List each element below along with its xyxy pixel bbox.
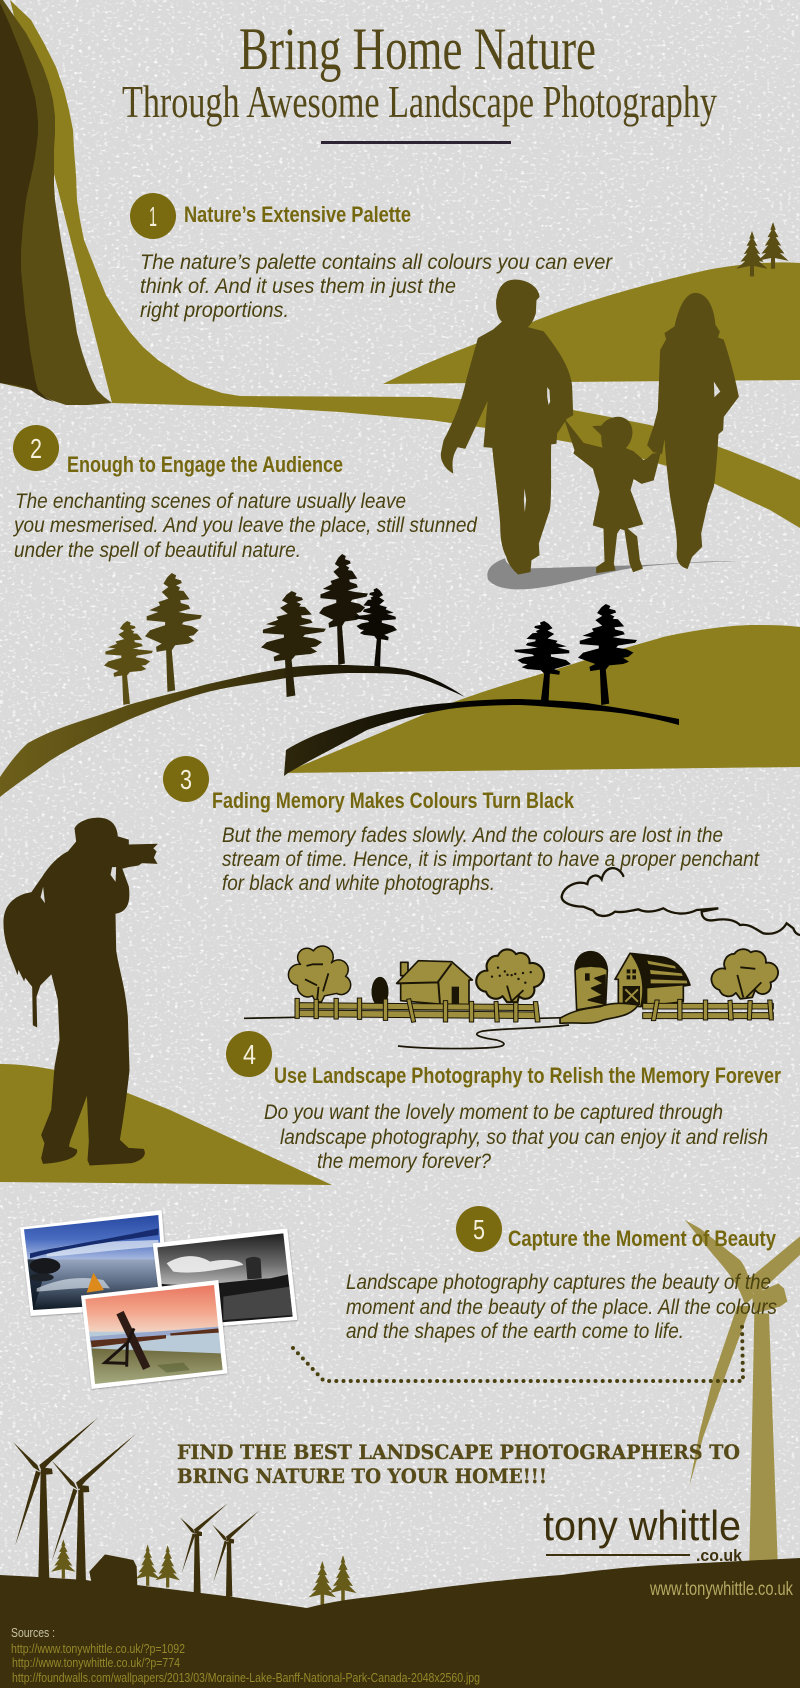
callout: find the best photographers: BRING NATURE TO YOUR HOME!!! xyxy=(177,1464,547,1488)
panel: section 4 xyxy=(226,1031,781,1173)
logo: tony whittle: .co.uk xyxy=(696,1546,743,1565)
turbine 4 xyxy=(212,1511,259,1597)
panel: section 5 xyxy=(346,1206,777,1343)
heading 3: Fading Memory Makes Colours Turn Black xyxy=(212,788,575,813)
title: Bring Home Nature xyxy=(239,16,596,82)
turbine 2 xyxy=(52,1434,136,1583)
callout: find the best photographers: FIND THE BEST LANDSCAPE PHOTOGRAPHERS TO xyxy=(177,1440,740,1464)
heading 2: Enough to Engage the Audience xyxy=(67,452,343,477)
child xyxy=(565,417,660,573)
number badge 1: 1 xyxy=(149,201,157,232)
fading trees xyxy=(104,554,397,705)
number badge 5: 5 xyxy=(473,1214,485,1245)
logo: tony whittle: tony whittle xyxy=(543,1502,741,1549)
pine trees xyxy=(51,1539,356,1605)
photo: blue lake xyxy=(20,1210,169,1316)
sources: http://foundwalls.com/wallpapers/2013/03/Moraine-Lake-Banff-National-Park-Canada-2048x2560.jpg xyxy=(12,1670,480,1685)
body 1 xyxy=(140,251,613,322)
body 2: The enchanting scenes of nature usually leave xyxy=(15,490,406,513)
body 2 xyxy=(12,490,478,562)
panel: right olive hill xyxy=(383,262,800,384)
ridge left xyxy=(0,665,465,797)
number badge 1 xyxy=(130,193,176,239)
panel: hill with trees right xyxy=(284,604,800,776)
photographer silhouette xyxy=(4,818,157,1165)
farm right part xyxy=(560,949,778,1023)
panel: hill with trees left xyxy=(0,554,465,797)
callout: find the best photographers xyxy=(177,1440,740,1488)
body 5 xyxy=(346,1271,777,1343)
body 3: for black and white photographs. xyxy=(222,872,495,895)
woman xyxy=(648,293,738,568)
body 1: right proportions. xyxy=(140,299,289,322)
number badge 3: 3 xyxy=(180,764,192,795)
body 2: you mesmerised. And you leave the place, still stunned xyxy=(12,514,478,537)
number badge 3 xyxy=(163,756,209,802)
panel: bottom wind turbines xyxy=(13,1417,356,1605)
number badge 5 xyxy=(456,1206,502,1252)
dotted connector arrow xyxy=(293,1323,743,1381)
panel: section 1 xyxy=(130,193,613,322)
sources xyxy=(11,1625,480,1685)
black trees xyxy=(514,604,637,705)
sources: http://www.tonywhittle.co.uk/?p=774 xyxy=(12,1655,180,1670)
body 5: and the shapes of the earth come to life. xyxy=(346,1320,684,1343)
body 3 xyxy=(222,824,760,895)
barn silhouette xyxy=(89,1554,137,1587)
panel: photographer xyxy=(0,818,332,1185)
family shadow xyxy=(487,558,738,589)
farm left part xyxy=(244,946,569,1049)
panel: section 2 xyxy=(12,425,478,562)
body 4: the memory forever? xyxy=(317,1150,491,1173)
ground xyxy=(0,1558,800,1688)
panel: dark ground footer xyxy=(0,1554,800,1688)
heading 1: Nature’s Extensive Palette xyxy=(184,202,411,227)
illustration: large wind turbine xyxy=(685,1220,800,1562)
turbine 1 xyxy=(13,1417,98,1580)
body 3: But the memory fades slowly. And the colours are lost in the xyxy=(222,824,723,847)
panel: section 3 xyxy=(163,756,760,895)
turbine 3 xyxy=(180,1503,228,1593)
body 4: Do you want the lovely moment to be captured through xyxy=(264,1101,723,1124)
body 2: under the spell of beautiful nature. xyxy=(14,539,301,562)
panel: photo collage xyxy=(20,1210,297,1389)
illustration: farm scene xyxy=(244,946,778,1049)
olive hill xyxy=(284,625,800,773)
body 4 xyxy=(264,1101,768,1173)
man xyxy=(441,280,573,574)
icon: top right pine trees xyxy=(736,222,789,276)
panel: top left flowing curves xyxy=(0,0,800,528)
black ridge xyxy=(284,699,679,776)
body 1: The nature’s palette contains all colours you can ever xyxy=(140,251,613,274)
photo: black and white tower xyxy=(153,1228,297,1331)
hill under photographer xyxy=(0,1064,332,1185)
number badge 4: 4 xyxy=(243,1039,256,1070)
number badge 2: 2 xyxy=(30,433,42,464)
sources: Sources : xyxy=(11,1625,55,1640)
number badge 4 xyxy=(226,1031,272,1077)
body 1: think of. And it uses them in just the xyxy=(140,275,456,298)
photo: anchor at sunset xyxy=(81,1280,228,1389)
sources: http://www.tonywhittle.co.uk/?p=1092 xyxy=(11,1641,185,1656)
title xyxy=(122,16,717,127)
body 3: stream of time. Hence, it is important to have a proper penchant xyxy=(222,848,760,871)
illustration: family silhouette xyxy=(441,280,738,589)
number badge 2 xyxy=(13,425,59,471)
title divider xyxy=(321,141,511,144)
icon: cloud outline xyxy=(562,868,800,935)
